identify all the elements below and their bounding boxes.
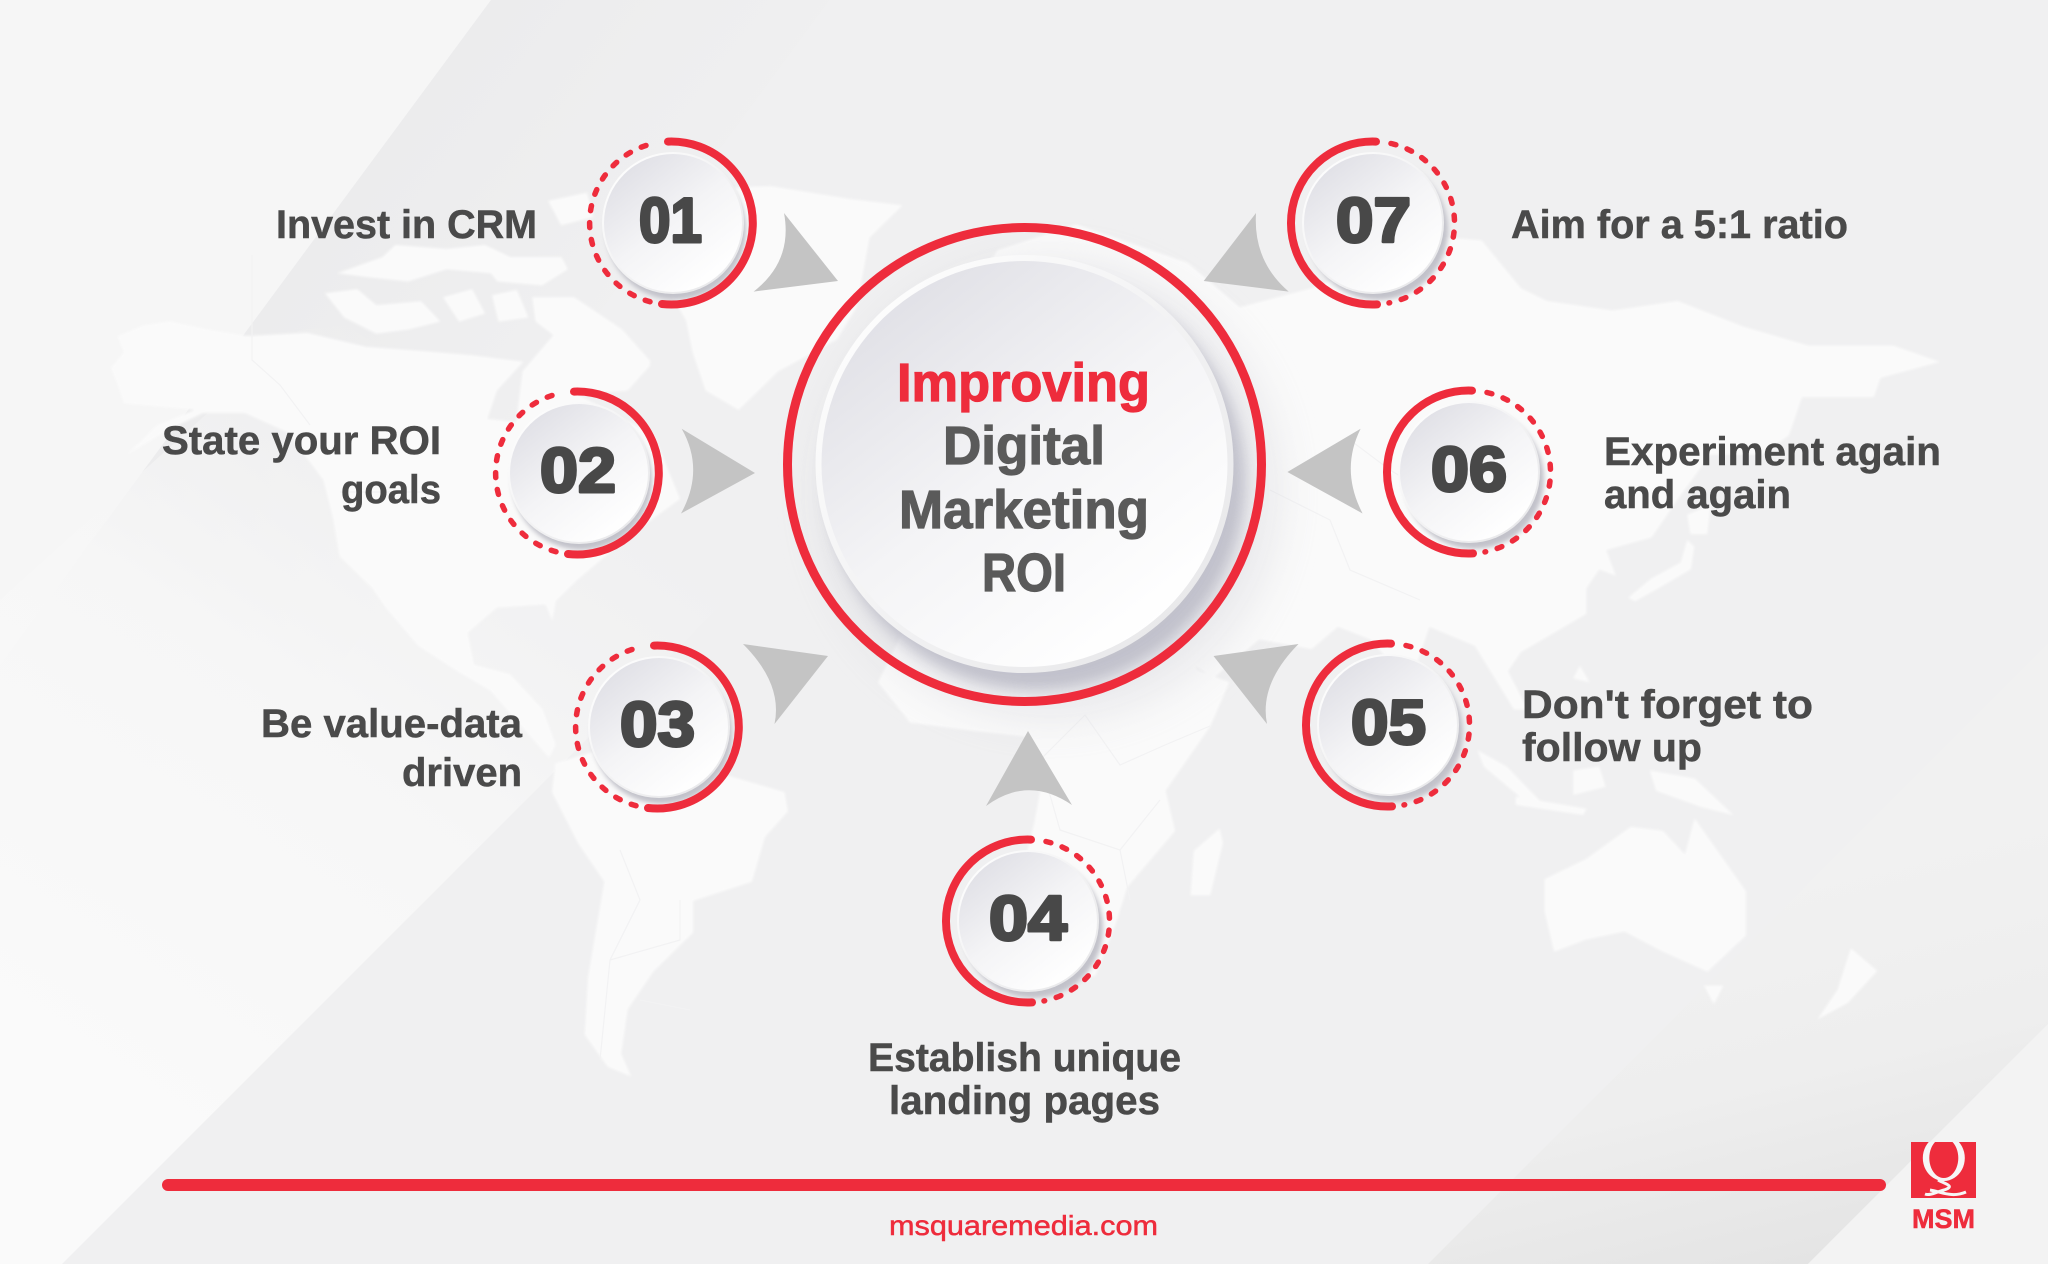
map: arctic islands <box>325 193 651 382</box>
map: north and central america <box>111 320 680 757</box>
soft outer shadow <box>825 265 1275 715</box>
step 02: 02 <box>540 436 616 506</box>
label 04: Establish unique <box>868 1036 1181 1080</box>
arrow 03 <box>743 644 828 724</box>
arrow 05 <box>1214 644 1298 724</box>
label 02: State your ROI <box>162 419 441 463</box>
step 07: 07 <box>1336 186 1411 256</box>
inner crescent shadow <box>827 272 1245 690</box>
step 02 <box>496 392 659 555</box>
disc rim <box>816 255 1234 673</box>
label 02: goals <box>341 468 441 512</box>
label 04 <box>868 1036 1181 1123</box>
red ring <box>788 228 1262 702</box>
center circle <box>788 228 1275 715</box>
label 06: and again <box>1604 473 1791 517</box>
arrow 06 <box>1287 429 1363 514</box>
label 06: Experiment again <box>1604 430 1941 474</box>
label 01: Invest in CRM <box>276 203 537 247</box>
step 03 <box>576 646 739 809</box>
world map <box>111 186 1939 1076</box>
label 03: driven <box>402 751 522 795</box>
disc face <box>822 261 1228 667</box>
logo text: MSM <box>1912 1204 1975 1234</box>
label 07: Aim for a 5:1 ratio <box>1511 203 1848 247</box>
label 05 <box>1522 683 1813 770</box>
step 03: 03 <box>620 690 695 760</box>
arrow 02 <box>681 429 755 514</box>
logo square with Q <box>1911 1142 1976 1198</box>
arrow 01 <box>754 213 838 292</box>
map: africa and madagascar <box>878 630 1229 992</box>
title: Marketing <box>899 480 1149 540</box>
step 06 <box>1387 391 1550 554</box>
title: Digital <box>943 416 1105 476</box>
map: south america <box>552 748 788 1076</box>
label 02 <box>162 419 441 512</box>
step 01: 01 <box>639 186 702 256</box>
title <box>897 353 1150 603</box>
step 01 <box>590 142 753 305</box>
arrow 07 <box>1204 213 1289 292</box>
map: indonesia and australia <box>1478 666 1746 1004</box>
step 05: 05 <box>1351 688 1426 758</box>
label 03 <box>261 702 523 795</box>
footer url: msquaremedia.com <box>889 1210 1158 1241</box>
label 06 <box>1604 430 1941 517</box>
step 06: 06 <box>1431 435 1507 505</box>
map: eurasia and japan <box>854 225 1939 709</box>
label 04: landing pages <box>889 1079 1160 1123</box>
label 05: Don't forget to <box>1522 683 1813 727</box>
map: country borders <box>252 255 1440 1060</box>
label 05: follow up <box>1522 726 1702 770</box>
logo <box>1911 1142 1976 1228</box>
step 07 <box>1291 142 1454 305</box>
step 04: 04 <box>989 884 1067 954</box>
map: greenland <box>654 186 902 410</box>
arrow 04 <box>986 731 1072 806</box>
step 05 <box>1306 644 1469 807</box>
footer bar <box>162 1179 1886 1191</box>
label 03: Be value-data <box>261 702 523 746</box>
title: Improving <box>897 353 1150 413</box>
step 04 <box>946 840 1109 1003</box>
title: ROI <box>982 543 1066 603</box>
map: new zealand <box>1818 949 1877 1019</box>
